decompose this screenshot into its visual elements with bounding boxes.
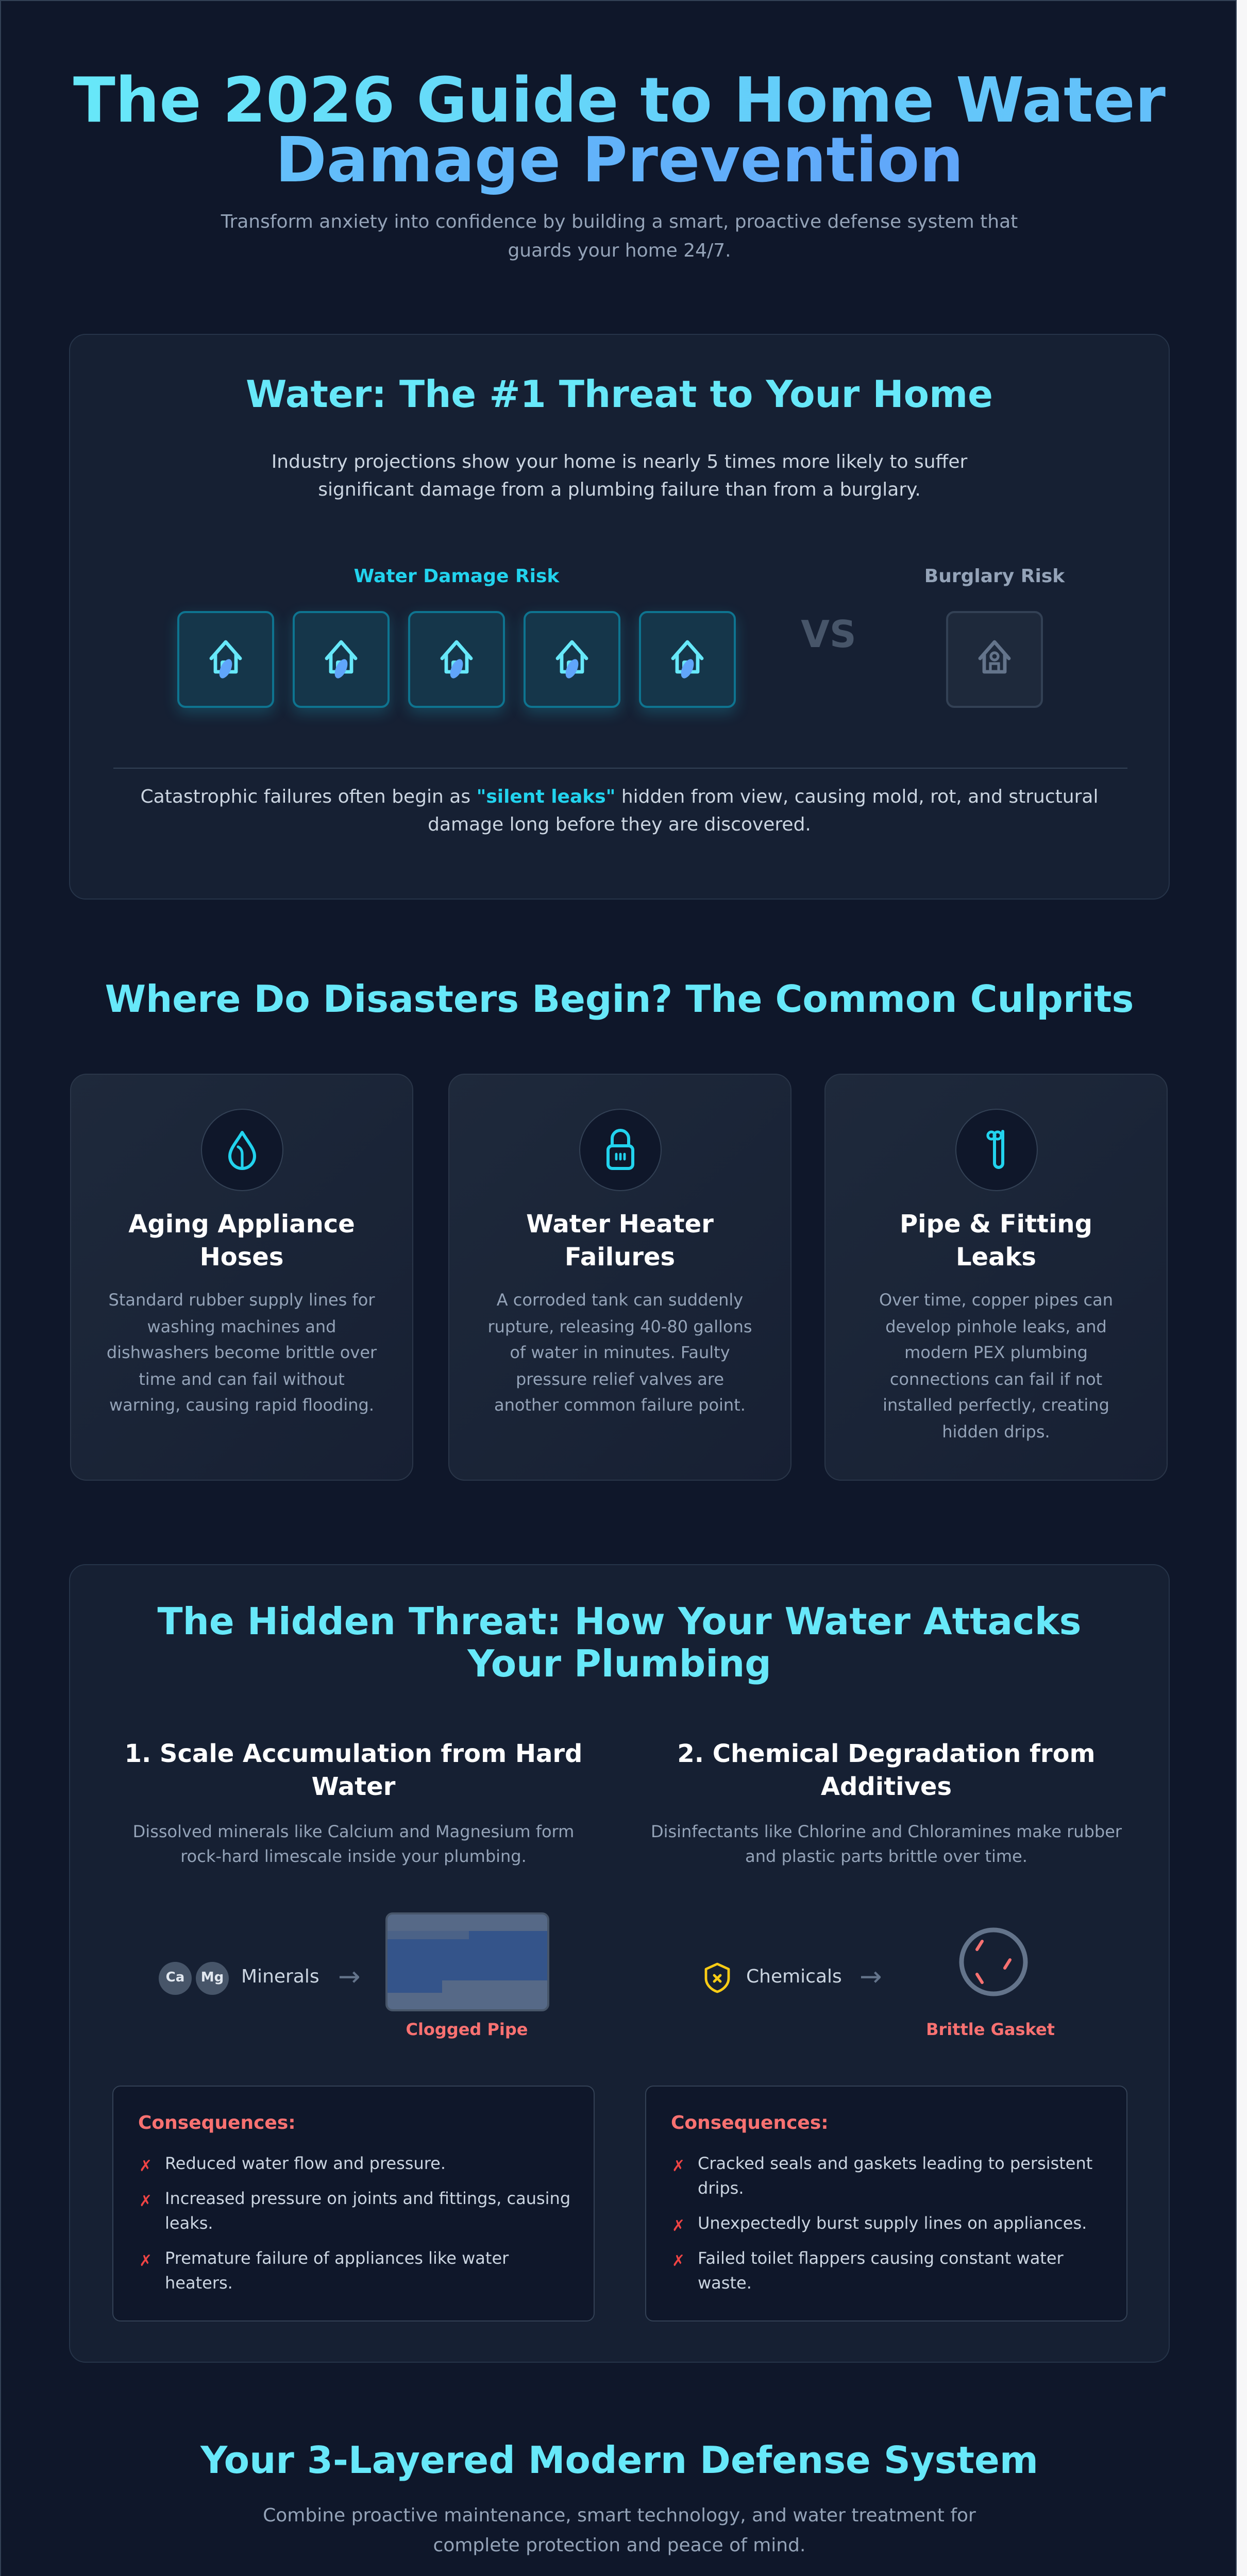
card title: Hoses	[200, 1243, 283, 1272]
icon: Mg: Mg	[201, 1970, 224, 1986]
subheading: scale accumulation: Water	[312, 1772, 395, 1801]
heading: hidden threat	[158, 1601, 1081, 1686]
card text: time and can fail without	[139, 1369, 345, 1389]
card title: Pipe & Fitting	[900, 1210, 1092, 1239]
callout: consequences chemicals: ✗	[672, 2251, 685, 2270]
card text: rupture, releasing 40-80 gallons	[487, 1316, 752, 1336]
label: chemicals: Chemicals	[746, 1966, 842, 1988]
card title: Leaks	[956, 1243, 1036, 1272]
card text: Standard rubber supply lines for	[108, 1290, 375, 1310]
text: silent leaks: damage long before they are discovered.	[428, 814, 811, 836]
card text: installed perfectly, creating	[883, 1396, 1109, 1415]
card title	[900, 1210, 1092, 1272]
card text	[487, 1290, 752, 1415]
icon: brittle gasket	[959, 1928, 1027, 1996]
card text: develop pinhole leaks, and	[885, 1316, 1107, 1336]
callout: consequences chemicals: Consequences:	[671, 2112, 829, 2134]
callout: consequences chemicals: waste.	[698, 2273, 752, 2293]
callout: consequences scale: heaters.	[165, 2273, 233, 2293]
callout: consequences scale: ✗	[139, 2192, 152, 2210]
heading: hidden threat: The Hidden Threat: How Your Water Attacks	[158, 1601, 1081, 1643]
card text: washing machines and	[147, 1316, 336, 1336]
card text	[879, 1290, 1113, 1442]
card text: of water in minutes. Faulty	[510, 1343, 730, 1362]
icon: house 4	[524, 611, 620, 708]
callout: consequences chemicals: drips.	[698, 2178, 744, 2198]
card text: warning, causing rapid flooding.	[109, 1396, 374, 1415]
callout: consequences scale: Consequences:	[138, 2112, 296, 2134]
icon: pipe	[955, 1109, 1038, 1191]
subheading: chemical degradation: 2. Chemical Degradation from	[677, 1739, 1096, 1768]
callout: consequences chemicals: Failed toilet flappers causing constant water	[698, 2248, 1064, 2268]
icon: Ca	[159, 1962, 192, 1995]
text: disinfectants: and plastic parts brittle over time.	[745, 1846, 1027, 1866]
diagram: chemicals to brittle gasket	[705, 1928, 1055, 2039]
card text: another common failure point.	[494, 1396, 746, 1415]
text: silent leaks	[140, 786, 1098, 836]
text: VS: VS	[801, 614, 856, 656]
heading: common culprits: Where Do Disasters Begin? The Common Culprits	[105, 979, 1134, 1021]
card text: pressure relief valves are	[516, 1369, 724, 1389]
icon: Mg	[196, 1962, 229, 1995]
callout: consequences scale: leaks.	[165, 2213, 213, 2233]
icon: water heater	[579, 1109, 662, 1191]
card text: dishwashers become brittle over	[107, 1343, 377, 1362]
icon: burglary house	[946, 611, 1043, 708]
label: clogged pipe: Clogged Pipe	[406, 2020, 528, 2039]
text: minerals	[133, 1822, 574, 1866]
card: pipe and fitting leaks	[824, 1074, 1168, 1481]
callout: consequences scale: Reduced water flow and pressure.	[165, 2154, 446, 2173]
panel: water threat	[69, 334, 1170, 900]
card text: connections can fail if not	[890, 1369, 1102, 1389]
card title: Aging Appliance	[128, 1210, 355, 1239]
label: brittle gasket: Brittle Gasket	[926, 2020, 1055, 2039]
label: minerals: Minerals	[241, 1966, 319, 1988]
callout: consequences scale: Premature failure of appliances like water	[165, 2248, 509, 2268]
card text	[107, 1290, 377, 1415]
icon: house 2	[293, 611, 390, 708]
icon: Ca: Ca	[166, 1970, 184, 1986]
text: defense subtitle: Combine proactive maintenance, smart technology, and water treatment for	[263, 2505, 976, 2527]
icon group: five water-damaged houses	[172, 611, 741, 718]
icon: water drop	[201, 1109, 283, 1191]
card title	[526, 1210, 714, 1272]
label: burglary risk: Burglary Risk	[924, 566, 1065, 587]
heading: #1 threat: Water: The #1 Threat to Your Home	[246, 374, 993, 416]
card text: Over time, copper pipes can	[879, 1290, 1113, 1310]
subheading: scale accumulation	[125, 1739, 582, 1801]
callout: consequences chemicals: Cracked seals and gaskets leading to persistent	[698, 2154, 1092, 2173]
heading: defense system: Your 3-Layered Modern Defense System	[200, 2440, 1038, 2482]
text: disinfectants	[651, 1822, 1122, 1866]
callout: consequences chemicals: ✗	[672, 2157, 685, 2175]
text: defense subtitle: complete protection and peace of mind.	[433, 2535, 805, 2556]
heading: hidden threat: Your Plumbing	[467, 1643, 771, 1686]
subtitle: Transform anxiety into confidence by building a smart, proactive defense system that	[221, 211, 1018, 233]
title: Damage Prevention	[275, 125, 964, 197]
text: silent leaks: Catastrophic failures often begin as "silent leaks" hidden from view, causing mold, rot, and structural	[140, 786, 1098, 808]
callout: consequences chemicals: ✗	[672, 2216, 685, 2235]
subtitle	[221, 211, 1018, 262]
diagram: minerals to clogged pipe	[159, 1912, 549, 2039]
icon: house 1	[177, 611, 274, 708]
subtitle: guards your home 24/7.	[508, 240, 731, 262]
subheading: chemical degradation	[677, 1739, 1096, 1801]
icon: house 3	[408, 611, 505, 708]
arrow: →	[338, 1962, 361, 1993]
card title	[128, 1210, 355, 1272]
text: industry projections	[272, 451, 968, 501]
text: defense subtitle	[263, 2505, 976, 2556]
card: aging appliance hoses	[70, 1074, 413, 1481]
title	[73, 65, 1166, 197]
panel: hidden threat	[69, 1564, 1170, 2363]
arrow: →	[860, 1962, 882, 1993]
subheading: chemical degradation: Additives	[821, 1772, 952, 1801]
subheading: scale accumulation: 1. Scale Accumulation from Hard	[125, 1739, 582, 1768]
callout: consequences scale: ✗	[139, 2157, 152, 2175]
card text: A corroded tank can suddenly	[497, 1290, 743, 1310]
card text: hidden drips.	[942, 1422, 1050, 1442]
text: minerals: rock-hard limescale inside your plumbing.	[180, 1846, 527, 1866]
text: disinfectants: Disinfectants like Chlorine and Chloramines make rubber	[651, 1822, 1122, 1841]
card title: Water Heater	[526, 1210, 714, 1239]
text: industry projections: significant damage from a plumbing failure than from a burglary.	[318, 479, 921, 501]
callout: consequences scale	[112, 2086, 595, 2321]
callout: consequences scale: ✗	[139, 2251, 152, 2270]
callout: consequences scale: Increased pressure on joints and fittings, causing	[165, 2189, 570, 2208]
card title: Failures	[565, 1243, 675, 1272]
text: minerals: Dissolved minerals like Calcium and Magnesium form	[133, 1822, 574, 1841]
icon: house 5	[639, 611, 736, 708]
card text: modern PEX plumbing	[904, 1343, 1088, 1362]
label: water damage risk: Water Damage Risk	[354, 566, 559, 587]
title: The 2026 Guide to Home Water	[73, 65, 1166, 137]
icon: yellow shield	[705, 1963, 730, 1993]
icon: clogged pipe	[385, 1912, 549, 2011]
callout: consequences chemicals	[645, 2086, 1127, 2321]
text: industry projections: Industry projections show your home is nearly 5 times more likely to suffer	[272, 451, 967, 473]
callout: consequences chemicals: Unexpectedly burst supply lines on appliances.	[698, 2213, 1087, 2233]
card: water heater failures	[448, 1074, 791, 1481]
